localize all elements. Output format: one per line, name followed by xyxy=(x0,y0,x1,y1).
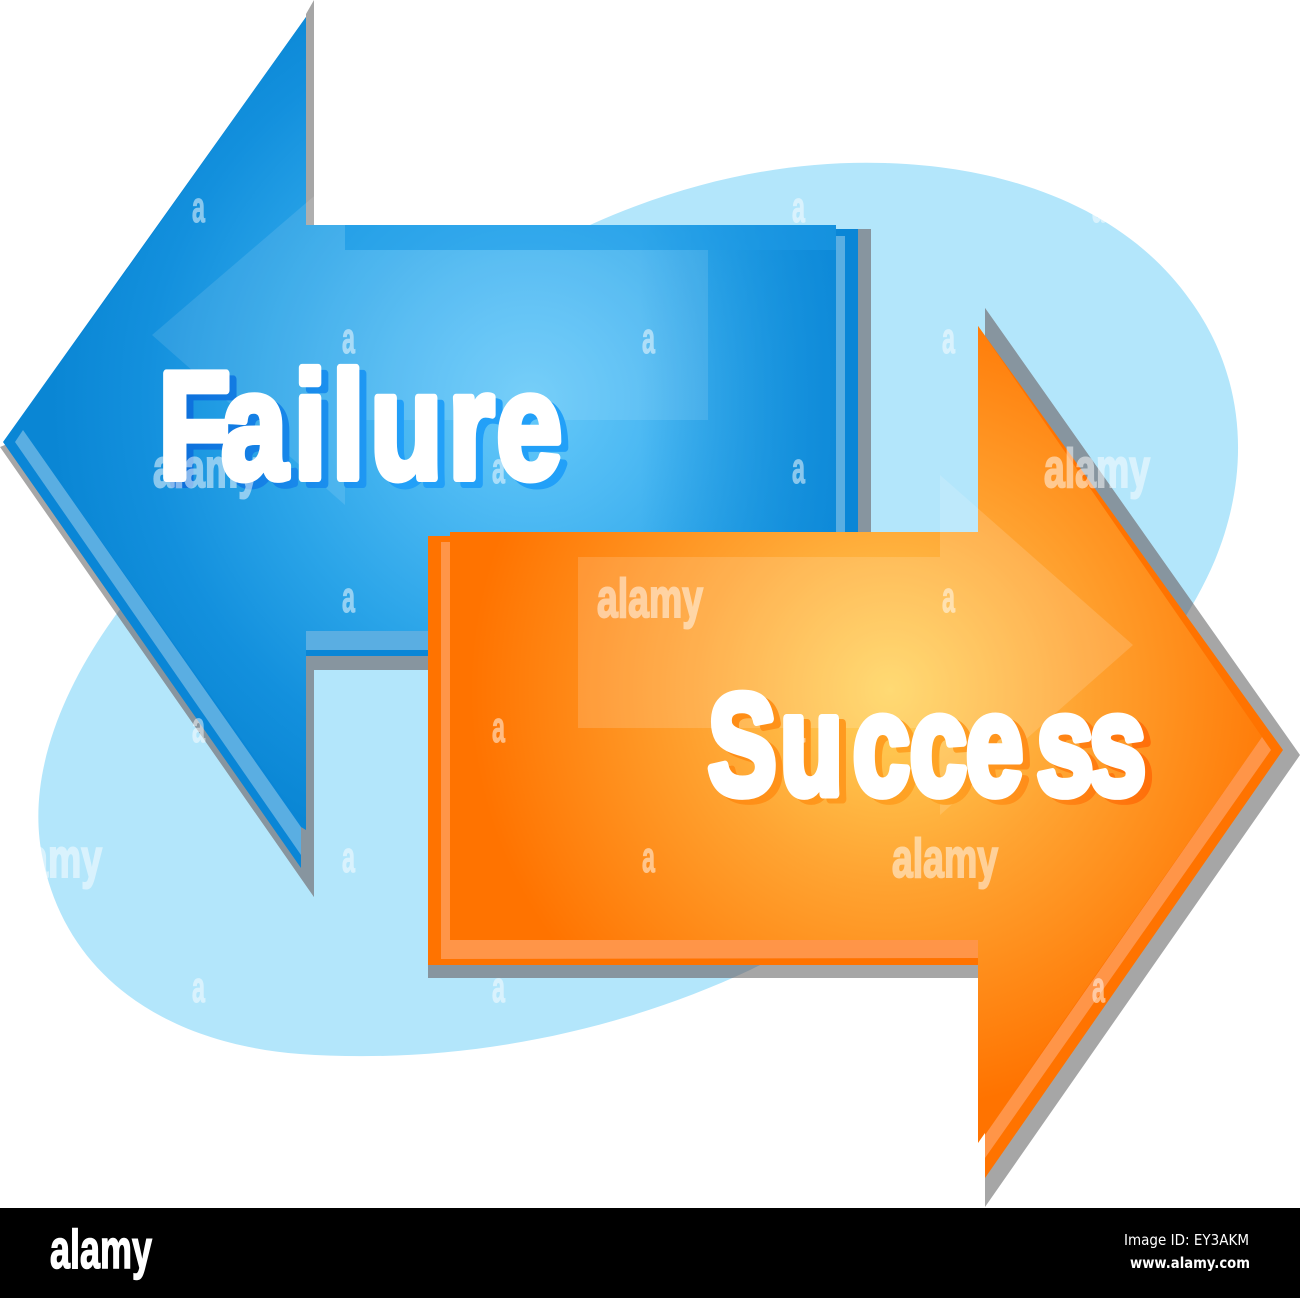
arrow shadow over blob xyxy=(428,308,1193,978)
watermarks: alamy xyxy=(1044,437,1150,499)
watermark marks: a xyxy=(492,963,505,1012)
watermark marks: a xyxy=(792,444,805,493)
site url: www.alamy.com xyxy=(1130,1254,1250,1272)
label: Success: Success xyxy=(715,670,1153,830)
label: Success: Success xyxy=(708,665,1146,825)
arrow: success xyxy=(428,308,1300,1207)
watermark marks: a xyxy=(942,314,955,363)
footer logo: alamy xyxy=(50,1218,152,1280)
watermarks: alamy xyxy=(153,437,259,499)
background blob xyxy=(38,163,1238,1056)
watermark marks: a xyxy=(192,703,205,752)
watermark marks: a xyxy=(642,314,655,363)
label: Failure: Failure xyxy=(158,341,562,510)
watermark marks xyxy=(192,183,1105,1012)
arrow: failure xyxy=(0,0,871,897)
watermark marks: a xyxy=(342,314,355,363)
watermark marks: a xyxy=(492,703,505,752)
watermark marks: a xyxy=(192,183,205,232)
watermark marks: a xyxy=(342,833,355,882)
arrow body xyxy=(450,326,1262,1143)
inner arrow highlight xyxy=(578,475,1133,815)
arrow shadow over blob xyxy=(116,229,871,897)
watermark marks: a xyxy=(792,183,805,232)
watermarks: alamy xyxy=(597,567,703,629)
watermark marks: a xyxy=(1092,963,1105,1012)
watermark marks: a xyxy=(1092,183,1105,232)
arrow rim xyxy=(428,326,1283,1178)
watermark marks: a xyxy=(942,573,955,622)
edge stripes xyxy=(441,542,1271,1158)
top band xyxy=(345,225,836,250)
arrow shadow xyxy=(428,308,1300,1207)
inner arrow highlight xyxy=(152,170,708,505)
right shading xyxy=(640,225,836,540)
watermark marks: a xyxy=(642,833,655,882)
watermark marks: a xyxy=(492,444,505,493)
watermark marks: a xyxy=(192,963,205,1012)
watermarks: alamy xyxy=(0,827,102,889)
arrow shadow xyxy=(0,0,871,897)
watermarks xyxy=(0,437,1150,889)
watermark marks: a xyxy=(792,703,805,752)
watermark marks: a xyxy=(342,573,355,622)
arrow rim xyxy=(3,17,858,868)
footer bar xyxy=(0,1208,1300,1298)
label: Failure: Failure xyxy=(165,347,569,516)
arrow body xyxy=(5,17,836,830)
watermarks: alamy xyxy=(892,827,998,889)
edge stripes xyxy=(15,236,845,855)
image id: Image ID: EY3AKM xyxy=(1124,1231,1249,1249)
